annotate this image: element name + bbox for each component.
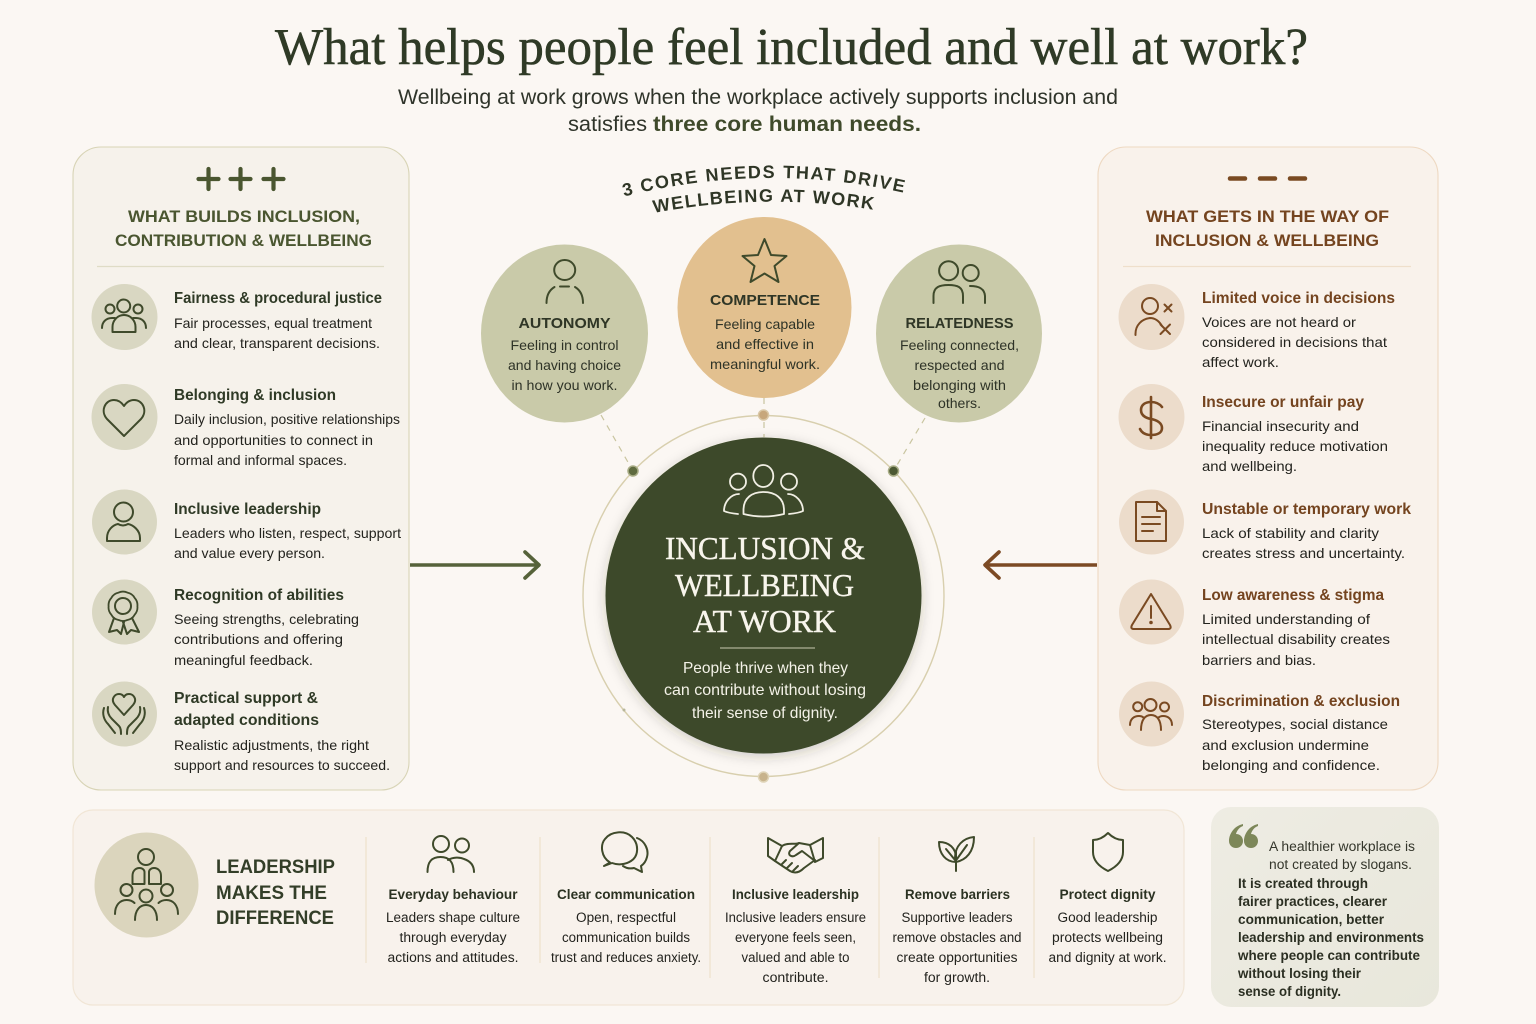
item: inclusive leadership: Inclusive leadership xyxy=(174,501,321,518)
callout: quote: where people can contribute xyxy=(1237,948,1420,963)
icon: person xyxy=(107,502,140,541)
subtitle: three core human needs. xyxy=(653,113,921,136)
panel heading: WHAT GETS IN THE WAY OF xyxy=(1146,207,1389,226)
item: unstable or temporary work: Unstable or temporary work xyxy=(1202,501,1411,518)
orbit ring and connectors xyxy=(583,398,944,782)
icon: person with crosses xyxy=(1135,298,1172,335)
icon: quote mark xyxy=(1229,824,1258,848)
need: relatedness xyxy=(876,244,1042,422)
item: recognition of abilities: Seeing strengths, celebrating xyxy=(174,611,359,627)
callout: quote: sense of dignity. xyxy=(1238,984,1341,999)
item: limited voice in decisions: Limited voice in decisions xyxy=(1202,290,1395,307)
item: discrimination and exclusion: Stereotypes, social distance xyxy=(1202,716,1388,732)
column: protect dignity xyxy=(1048,833,1166,965)
item: recognition of abilities: meaningful feedback. xyxy=(174,652,313,668)
panel heading xyxy=(1146,207,1389,250)
column: inclusive leadership xyxy=(725,838,866,985)
column: clear communication: Open, respectful xyxy=(576,910,676,925)
callout: quote: without losing their xyxy=(1237,966,1362,981)
panel background xyxy=(73,147,409,790)
need: competence: and effective in xyxy=(716,336,814,352)
item: inclusive leadership: Leaders who listen, respect, support xyxy=(174,525,401,541)
need: autonomy: AUTONOMY xyxy=(518,315,610,332)
callout: quote: communication, better xyxy=(1238,912,1385,927)
callout: quote xyxy=(1211,807,1439,1007)
callout: quote: not created by slogans. xyxy=(1269,857,1412,872)
column: remove barriers: create opportunities xyxy=(896,950,1018,965)
item: fairness and procedural justice xyxy=(92,284,382,351)
item: inclusive leadership xyxy=(92,490,401,561)
item: practical support: support and resources to succeed. xyxy=(174,757,390,773)
item: discrimination and exclusion: Discrimination & exclusion xyxy=(1202,693,1400,710)
icon: group xyxy=(102,300,146,332)
subtitle xyxy=(398,86,1118,136)
item: fairness and procedural justice: and clear, transparent decisions. xyxy=(174,335,380,351)
callout: quote: fairer practices, clearer xyxy=(1238,894,1388,909)
panel: what builds inclusion xyxy=(73,147,409,790)
column: clear communication: trust and reduces anxiety. xyxy=(551,950,701,965)
central heading: INCLUSION & xyxy=(665,530,865,566)
icon: warning triangle xyxy=(1131,594,1171,629)
icon: handshake xyxy=(768,838,823,872)
need: autonomy: and having choice xyxy=(508,357,621,373)
column: everyday behaviour: through everyday xyxy=(400,930,507,945)
panel heading: INCLUSION & WELLBEING xyxy=(1155,231,1379,250)
central caption: their sense of dignity. xyxy=(692,705,838,722)
item: practical support: adapted conditions xyxy=(174,712,319,729)
need: relatedness: belonging with xyxy=(913,377,1006,393)
column: remove barriers: Remove barriers xyxy=(905,886,1010,902)
icon: hands holding heart xyxy=(103,694,145,734)
item: unstable or temporary work: Lack of stability and clarity xyxy=(1202,525,1379,541)
item: recognition of abilities xyxy=(92,580,359,668)
icon: three plus signs xyxy=(198,169,284,189)
column: protect dignity: and dignity at work. xyxy=(1048,950,1166,965)
item: low awareness and stigma xyxy=(1119,580,1390,668)
item: inclusive leadership: and value every person. xyxy=(174,545,325,561)
column: remove barriers: Supportive leaders xyxy=(902,910,1013,925)
leadership heading xyxy=(216,857,335,929)
item: belonging and inclusion: Daily inclusion, positive relationships xyxy=(174,411,400,427)
item: insecure or unfair pay: and wellbeing. xyxy=(1202,458,1297,474)
icon: sprout xyxy=(939,837,974,871)
arrow: supports towards centre xyxy=(410,552,539,578)
panel heading: WHAT BUILDS INCLUSION, xyxy=(128,207,360,226)
icon: heart xyxy=(104,400,144,436)
item: discrimination and exclusion: and exclusion undermine xyxy=(1202,737,1369,753)
column: protect dignity: Good leadership xyxy=(1058,910,1158,925)
column: remove barriers xyxy=(892,837,1022,985)
icon: speech bubbles xyxy=(602,832,648,872)
item: practical support: Realistic adjustments, the right xyxy=(174,737,369,753)
column: clear communication xyxy=(551,832,701,965)
icon: two people xyxy=(934,261,985,303)
item: insecure or unfair pay: inequality reduce motivation xyxy=(1202,438,1388,454)
column: inclusive leadership: Inclusive leaders ensure xyxy=(725,910,866,925)
icon: dollar sign xyxy=(1140,397,1162,438)
central caption: can contribute without losing xyxy=(664,682,866,699)
need: autonomy: Feeling in control xyxy=(510,337,618,353)
central heading xyxy=(665,530,865,639)
central heading: WELLBEING xyxy=(675,567,854,603)
callout: quote: It is created through xyxy=(1238,876,1368,891)
need: competence: Feeling capable xyxy=(715,316,815,332)
callout: quote: leadership and environments xyxy=(1238,930,1424,945)
item: belonging and inclusion: Belonging & inclusion xyxy=(174,387,336,404)
subtitle: satisfies xyxy=(568,113,647,136)
subtitle: Wellbeing at work grows when the workplace actively supports inclusion and xyxy=(398,86,1118,109)
item: low awareness and stigma: Limited understanding of xyxy=(1202,611,1370,627)
column: inclusive leadership: valued and able to xyxy=(742,950,850,965)
item: limited voice in decisions: Voices are not heard or xyxy=(1202,314,1356,330)
column: everyday behaviour: Everyday behaviour xyxy=(388,886,518,902)
item: discrimination and exclusion xyxy=(1119,682,1400,773)
need: relatedness: respected and xyxy=(914,357,1004,373)
arrow: barriers towards centre xyxy=(985,552,1097,578)
item: fairness and procedural justice: Fair processes, equal treatment xyxy=(174,315,372,331)
panel heading xyxy=(115,207,372,250)
panel background xyxy=(73,810,1184,1005)
item: unstable or temporary work xyxy=(1119,490,1411,561)
icon: leader and team xyxy=(115,849,178,920)
need: relatedness: others. xyxy=(938,395,981,411)
icon: two people xyxy=(428,836,474,872)
need: relatedness: Feeling connected, xyxy=(900,337,1019,353)
leadership heading: DIFFERENCE xyxy=(216,908,334,929)
need: autonomy: in how you work. xyxy=(512,377,618,393)
column: protect dignity: Protect dignity xyxy=(1060,886,1156,902)
item: insecure or unfair pay: Insecure or unfair pay xyxy=(1202,394,1364,411)
icon: award ribbon xyxy=(109,592,139,634)
column: remove barriers: for growth. xyxy=(924,970,990,985)
column: everyday behaviour xyxy=(386,836,520,965)
column: clear communication: Clear communication xyxy=(557,886,695,902)
title: What helps people feel included and well at work? xyxy=(275,19,1308,76)
need: competence xyxy=(678,217,852,398)
column: inclusive leadership: Inclusive leadership xyxy=(732,886,859,902)
central caption xyxy=(664,660,866,722)
item: belonging and inclusion xyxy=(92,384,400,468)
central circle: inclusion and wellbeing at work xyxy=(606,438,922,754)
item: unstable or temporary work: creates stress and uncertainty. xyxy=(1202,545,1405,561)
item: fairness and procedural justice: Fairness & procedural justice xyxy=(174,290,382,307)
column: protect dignity: protects wellbeing xyxy=(1052,930,1163,945)
panel: leadership makes the difference xyxy=(73,810,1184,1005)
callout: quote: A healthier workplace is xyxy=(1269,839,1415,854)
need: autonomy xyxy=(481,244,648,422)
icon: person xyxy=(546,260,583,303)
item: limited voice in decisions xyxy=(1118,284,1395,370)
column: clear communication: communication builds xyxy=(562,930,690,945)
panel heading: CONTRIBUTION & WELLBEING xyxy=(115,231,372,250)
central heading: AT WORK xyxy=(693,603,836,639)
item: practical support xyxy=(92,682,390,773)
need: competence: meaningful work. xyxy=(710,356,820,372)
item: low awareness and stigma: intellectual disability creates xyxy=(1202,631,1390,647)
need: relatedness: RELATEDNESS xyxy=(906,315,1014,332)
curved heading: 3 core needs: 3 CORE NEEDS THAT DRIVE WELLBEING AT WORK xyxy=(622,165,905,212)
item: belonging and inclusion: and opportunities to connect in xyxy=(174,432,373,448)
icon: document xyxy=(1136,502,1166,541)
panel: what gets in the way xyxy=(1098,147,1438,790)
column: remove barriers: remove obstacles and xyxy=(892,930,1022,945)
icon: star xyxy=(742,239,786,282)
item: insecure or unfair pay: Financial insecurity and xyxy=(1202,418,1359,434)
item: limited voice in decisions: affect work. xyxy=(1202,354,1279,370)
icon: group xyxy=(1130,699,1172,730)
icon: shield xyxy=(1093,833,1123,871)
item: low awareness and stigma: Low awareness & stigma xyxy=(1202,587,1384,604)
panel background xyxy=(1098,147,1438,790)
leadership badge xyxy=(94,832,198,938)
item: limited voice in decisions: considered in decisions that xyxy=(1202,334,1387,350)
column: everyday behaviour: Leaders shape culture xyxy=(386,910,520,925)
column: inclusive leadership: everyone feels seen, xyxy=(735,930,856,945)
item: discrimination and exclusion: belonging and confidence. xyxy=(1202,757,1380,773)
item: recognition of abilities: Recognition of abilities xyxy=(174,587,344,604)
leadership heading: MAKES THE xyxy=(216,883,327,904)
icon: three minus signs xyxy=(1230,176,1305,181)
icon: group of people xyxy=(724,465,803,516)
item: low awareness and stigma: barriers and bias. xyxy=(1202,652,1316,668)
item: recognition of abilities: contributions and offering xyxy=(174,631,343,647)
leadership heading: LEADERSHIP xyxy=(216,857,335,878)
item: belonging and inclusion: formal and informal spaces. xyxy=(174,452,347,468)
column: inclusive leadership: contribute. xyxy=(762,970,828,985)
column: everyday behaviour: actions and attitudes. xyxy=(388,950,518,965)
item: practical support: Practical support & xyxy=(174,690,318,707)
central caption: People thrive when they xyxy=(683,660,848,677)
need: competence: COMPETENCE xyxy=(710,292,820,309)
item: insecure or unfair pay xyxy=(1118,384,1388,474)
